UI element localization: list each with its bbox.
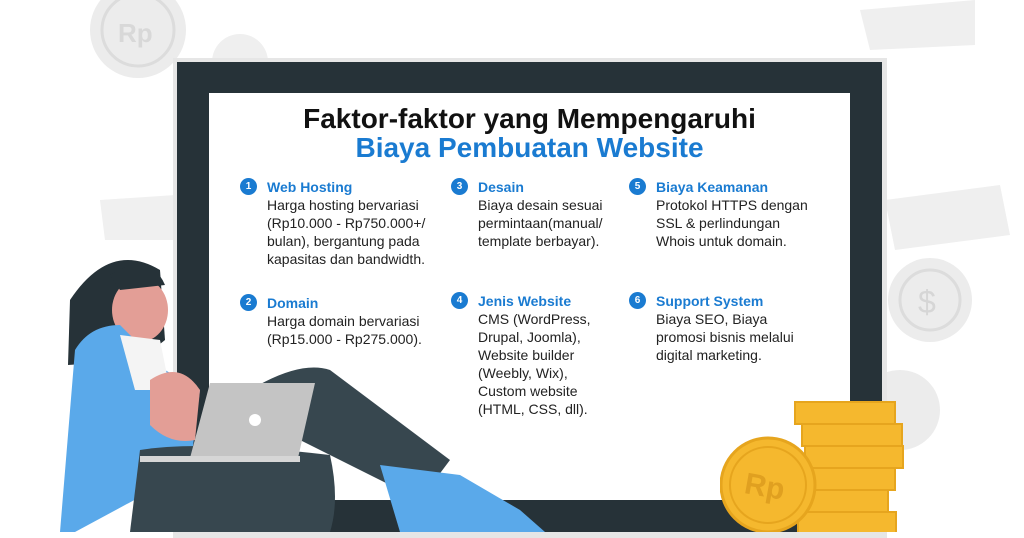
item 5: SSL & perlindungan <box>656 215 780 231</box>
item 3 <box>451 178 603 249</box>
item 1: (Rp10.000 - Rp750.000+/ <box>267 215 425 231</box>
item 4: CMS (WordPress, <box>478 311 591 327</box>
background decorations: $ <box>918 284 936 320</box>
title <box>303 103 756 163</box>
item 1: Web Hosting <box>267 179 352 195</box>
item 5 <box>629 178 808 249</box>
item 4: Jenis Website <box>478 293 571 309</box>
coins stack: Rp <box>742 467 787 507</box>
item 3: permintaan(manual/ <box>478 215 603 231</box>
item 2: Harga domain bervariasi <box>267 313 420 329</box>
text: 5 <box>635 181 640 192</box>
item 5: Biaya Keamanan <box>656 179 768 195</box>
screen <box>209 93 850 500</box>
coins stack <box>720 401 904 532</box>
item 6: digital marketing. <box>656 347 762 363</box>
item 3: Desain <box>478 179 524 195</box>
text: 6 <box>635 295 640 306</box>
item 4: (Weebly, Wix), <box>478 365 568 381</box>
item 4: Custom website <box>478 383 578 399</box>
item 1 <box>240 178 426 267</box>
item 4 <box>451 292 591 417</box>
item 5: Whois untuk domain. <box>656 233 787 249</box>
item 1: Harga hosting bervariasi <box>267 197 419 213</box>
item 3: template berbayar). <box>478 233 599 249</box>
item 6: Biaya SEO, Biaya <box>656 311 767 327</box>
item 6: promosi bisnis melalui <box>656 329 794 345</box>
item 1: kapasitas dan bandwidth. <box>267 251 425 267</box>
text: 4 <box>457 295 462 306</box>
illustration: woman with laptop <box>60 260 545 532</box>
item 2 <box>240 294 422 347</box>
item 4: (HTML, CSS, dll). <box>478 401 588 417</box>
item 1: bulan), bergantung pada <box>267 233 420 249</box>
text: 1 <box>246 181 251 192</box>
item 3: Biaya desain sesuai <box>478 197 603 213</box>
monitor frame <box>173 58 887 538</box>
item 6 <box>629 292 794 363</box>
item 2: (Rp15.000 - Rp275.000). <box>267 331 422 347</box>
background decorations: Rp <box>118 18 153 48</box>
item 2: Domain <box>267 295 318 311</box>
item 6: Support System <box>656 293 763 309</box>
title: Biaya Pembuatan Website <box>355 132 704 163</box>
item 4: Website builder <box>478 347 574 363</box>
text: 3 <box>457 181 462 192</box>
item 5: Protokol HTTPS dengan <box>656 197 808 213</box>
item 4: Drupal, Joomla), <box>478 329 581 345</box>
text: 2 <box>246 297 251 308</box>
title: Faktor-faktor yang Mempengaruhi <box>303 103 756 134</box>
